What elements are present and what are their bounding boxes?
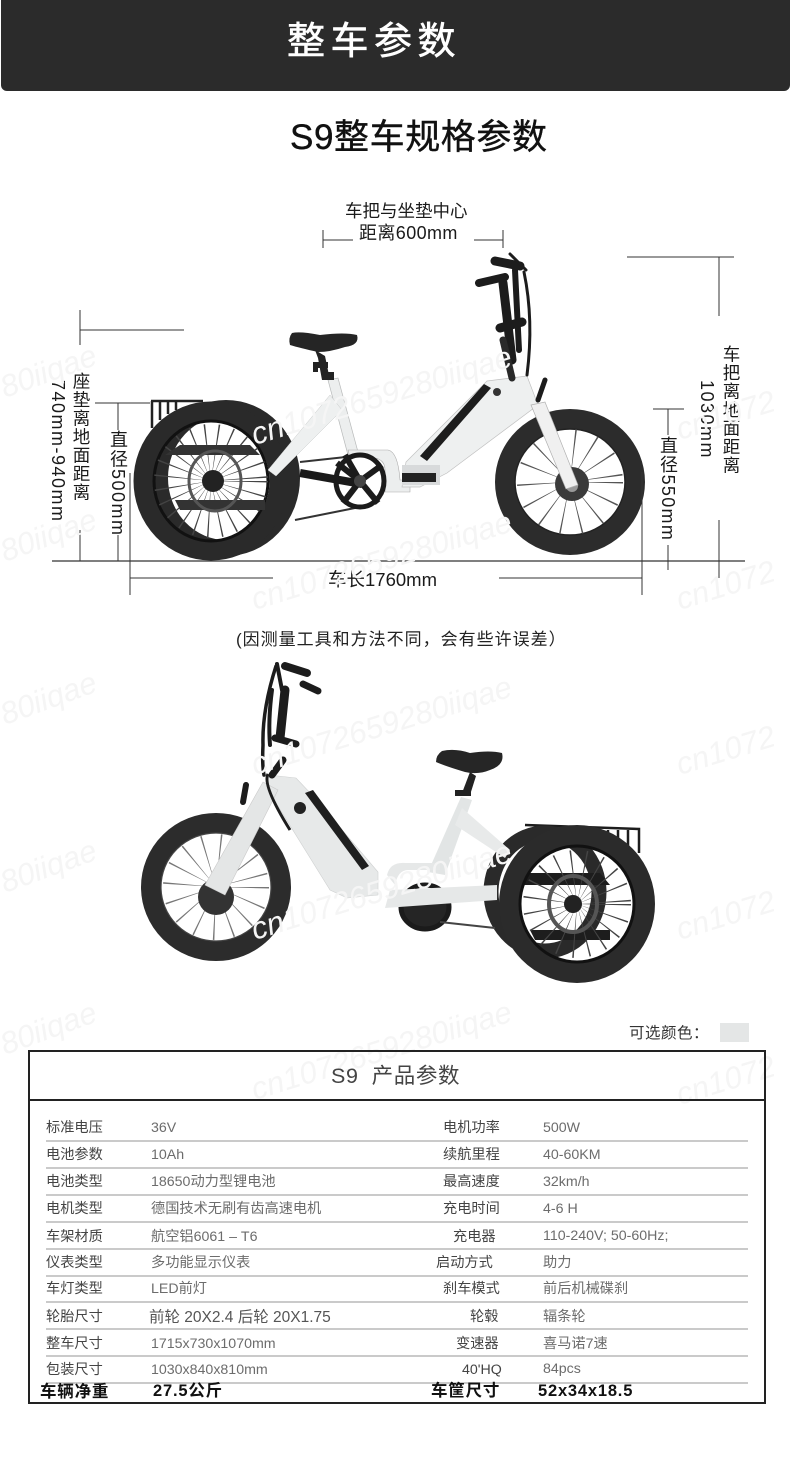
row: battery and range xyxy=(46,1146,601,1163)
saddle xyxy=(436,750,502,796)
saddle xyxy=(289,332,358,380)
row: tyre and hub: 辐条轮 xyxy=(543,1308,586,1325)
side view trike diagram xyxy=(143,254,635,551)
optional colours xyxy=(629,1023,749,1042)
row: package and container: 84pcs xyxy=(543,1361,581,1377)
row: net weight and basket size xyxy=(40,1380,633,1401)
row: frame and charger: 车架材质 xyxy=(46,1228,103,1245)
watermarks: cn1072659280iiqae xyxy=(247,339,516,452)
row: display and start mode: 多功能显示仪表 xyxy=(151,1254,250,1271)
row: motor type and charge time: 电机类型 xyxy=(46,1201,103,1217)
watermarks: cn1072659280iiqae xyxy=(247,994,516,1107)
row: motor type and charge time: 德国技术无刷有齿高速电机 xyxy=(151,1200,321,1217)
watermarks: cn1072 xyxy=(672,1048,779,1112)
row: battery type and top speed: 32km/h xyxy=(543,1174,590,1190)
row: light and brake: 前后机械碟刹 xyxy=(543,1280,628,1297)
overall length dimension xyxy=(130,472,642,595)
label: handlebar height: 车把离地面距离 xyxy=(721,345,741,474)
handlebar height dimension xyxy=(627,257,734,578)
row: light and brake xyxy=(46,1280,628,1297)
row: voltage and motor power xyxy=(46,1119,581,1136)
table frame xyxy=(29,1051,765,1403)
row: motor type and charge time: 充电时间 xyxy=(443,1201,500,1217)
spec table xyxy=(29,1051,765,1403)
row: light and brake: 刹车模式 xyxy=(443,1280,500,1297)
label: saddle height: 740mm-940mm xyxy=(48,380,68,523)
table heading: S9 产品参数 xyxy=(331,1064,460,1088)
row: light and brake: 车灯类型 xyxy=(46,1280,103,1297)
row: size and gears xyxy=(46,1335,608,1352)
front wheel xyxy=(505,419,635,545)
row: net weight and basket size: 车筐尺寸 xyxy=(431,1380,500,1400)
header title: 整车参数 xyxy=(287,21,461,63)
front wheel xyxy=(151,823,281,951)
row: battery and range: 电池参数 xyxy=(46,1146,103,1163)
row: battery type and top speed: 电池类型 xyxy=(46,1174,103,1190)
row: net weight and basket size: 52x34x18.5 xyxy=(538,1382,633,1400)
row: tyre and hub: 轮胎尺寸 xyxy=(46,1309,103,1325)
front wheel diameter dimension xyxy=(653,409,684,570)
colour swatch xyxy=(720,1023,749,1042)
watermarks: cn1072 xyxy=(672,718,779,782)
label: front wheel diameter: 直径550mm xyxy=(658,436,678,541)
row: motor type and charge time: 4-6 H xyxy=(543,1201,578,1217)
row: net weight and basket size: 车辆净重 xyxy=(40,1381,109,1401)
watermarks: cn1072 xyxy=(672,383,779,447)
rear wheel diameter dimension xyxy=(95,403,150,561)
label: rear wheel diameter: 直径500mm xyxy=(108,430,128,537)
row: battery type and top speed: 18650动力型锂电池 xyxy=(151,1174,276,1190)
far rear wheel xyxy=(491,833,599,951)
row: motor type and charge time xyxy=(46,1200,578,1217)
optional colours: 可选颜色： xyxy=(629,1024,709,1042)
near rear wheel xyxy=(509,835,645,973)
row: battery and range: 10Ah xyxy=(151,1147,184,1163)
label: saddle height: 座垫离地面距离 xyxy=(71,372,91,502)
saddle height dimension xyxy=(80,310,184,561)
subtitle: S9整车规格参数 xyxy=(290,118,548,157)
watermarks xyxy=(0,337,779,1112)
ground line xyxy=(52,560,745,562)
label: handlebar to saddle distance xyxy=(345,201,468,243)
label: handlebar height xyxy=(697,345,741,474)
row: size and gears: 1715x730x1070mm xyxy=(151,1336,276,1352)
three-quarter view trike photo xyxy=(151,664,645,973)
row: tyre and hub xyxy=(46,1308,586,1326)
frame xyxy=(268,376,578,492)
row: voltage and motor power: 标准电压 xyxy=(46,1120,103,1136)
row: voltage and motor power: 36V xyxy=(151,1120,177,1136)
row: battery and range: 40-60KM xyxy=(543,1147,601,1163)
row: voltage and motor power: 500W xyxy=(543,1120,581,1136)
row: display and start mode: 仪表类型 xyxy=(46,1255,103,1271)
chainring xyxy=(400,885,450,930)
row: light and brake: LED前灯 xyxy=(151,1280,207,1297)
far rear wheel xyxy=(160,408,292,548)
watermarks: cn1072659280iiqae xyxy=(247,669,516,782)
header banner xyxy=(1,0,790,91)
label: overall length: 车长1760mm xyxy=(328,569,437,590)
row: package and container: 1030x840x810mm xyxy=(151,1362,268,1378)
row: frame and charger: 充电器 xyxy=(453,1229,496,1245)
label: handlebar to saddle distance: 距离600mm xyxy=(359,223,458,243)
row: package and container: 40'HQ xyxy=(462,1362,502,1378)
label: handlebar to saddle distance: 车把与坐垫中心 xyxy=(345,201,468,221)
near rear wheel xyxy=(143,411,279,551)
handlebar xyxy=(243,664,318,802)
row: frame and charger xyxy=(46,1228,668,1245)
measurement note: (因测量工具和方法不同，会有些许误差） xyxy=(236,630,567,649)
row: battery type and top speed xyxy=(46,1173,590,1190)
row: package and container xyxy=(46,1361,581,1378)
row: tyre and hub: 前轮 20X2.4 后轮 20X1.75 xyxy=(149,1308,331,1326)
dimension lines xyxy=(52,230,745,595)
row: frame and charger: 110-240V; 50-60Hz; xyxy=(543,1228,668,1244)
chain xyxy=(440,922,495,928)
row: size and gears: 变速器 xyxy=(456,1336,499,1352)
row: size and gears: 喜马诺7速 xyxy=(543,1336,608,1352)
frame xyxy=(205,774,510,908)
watermarks: cn1072659280iiqae xyxy=(247,504,516,617)
chain xyxy=(295,456,355,520)
row: net weight and basket size: 27.5公斤 xyxy=(153,1381,223,1400)
row: battery and range: 续航里程 xyxy=(443,1146,500,1163)
row rules xyxy=(46,1141,748,1383)
row: tyre and hub: 轮毂 xyxy=(470,1309,498,1325)
rack xyxy=(525,825,639,853)
row: package and container: 包装尺寸 xyxy=(46,1362,103,1378)
row: battery type and top speed: 最高速度 xyxy=(443,1173,500,1190)
handlebar xyxy=(479,254,545,400)
row: display and start mode xyxy=(46,1254,571,1271)
handlebar to saddle dimension xyxy=(323,230,503,248)
row: size and gears: 整车尺寸 xyxy=(46,1335,103,1352)
watermarks: cn1072 xyxy=(672,553,779,617)
row: display and start mode: 启动方式 xyxy=(436,1255,493,1271)
row: display and start mode: 助力 xyxy=(543,1255,571,1271)
chainring and crank xyxy=(300,455,384,507)
rear rack xyxy=(151,401,203,428)
watermarks: cn1072 xyxy=(672,883,779,947)
row: frame and charger: 航空铝6061 – T6 xyxy=(151,1229,258,1245)
row: voltage and motor power: 电机功率 xyxy=(443,1119,500,1136)
label: saddle height xyxy=(48,372,91,523)
watermarks: cn1072659280iiqae xyxy=(247,834,516,947)
label: handlebar height: 1030mm xyxy=(697,380,717,459)
